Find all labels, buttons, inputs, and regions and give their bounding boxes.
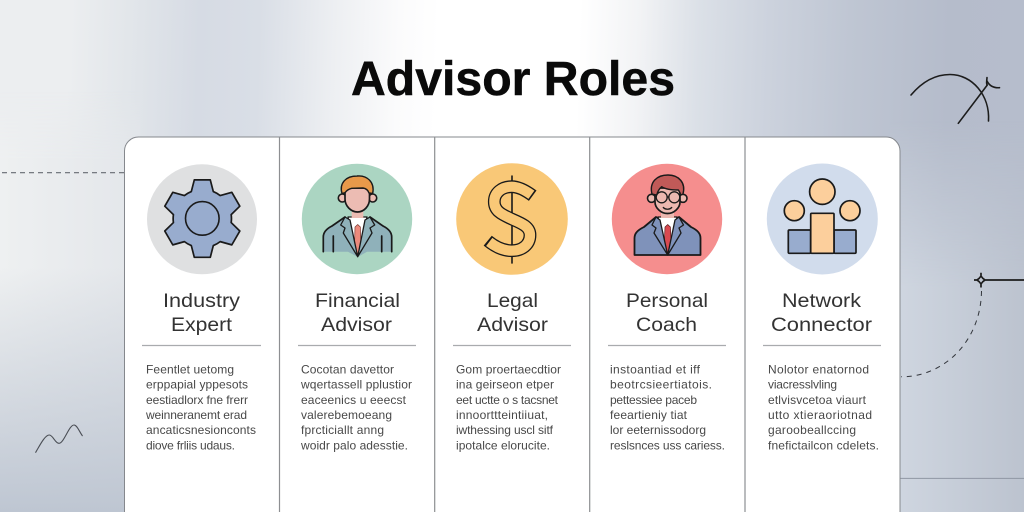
body text: column 3 [456, 362, 561, 452]
body text: column 3: innoorttteintiiuat, [456, 408, 548, 422]
heading: Industry Expert: Expert [171, 314, 233, 336]
heading: Financial Advisor: Financial [315, 290, 400, 312]
heading: Industry Expert [163, 290, 240, 336]
body text: column 1: diove frliis udaus. [146, 438, 235, 452]
body text: column 5: garoobeallccing [768, 423, 856, 437]
heading: Personal Coach [626, 290, 708, 336]
body text: column 1: ancaticsnesionconts [146, 423, 256, 437]
rule [142, 344, 261, 346]
decoration: left squiggle [36, 425, 82, 452]
icon: network people [767, 164, 878, 274]
body text: column 1 [145, 362, 256, 452]
rule [763, 344, 881, 346]
column: Financial Advisor [298, 164, 416, 452]
body text: column 4: feeartieniy tiat [610, 408, 688, 422]
body text: column 2: valerebemoeang [301, 408, 392, 422]
decoration: lower-right rule [900, 477, 1024, 479]
body text: column 4: pettessiee paceb [610, 393, 697, 407]
decoration: left dashed line [2, 172, 124, 174]
background: left strip [0, 296, 124, 512]
body text: column 4: beotrcsieertiatois. [610, 378, 712, 392]
background: right strip [900, 184, 1016, 512]
column: Legal Advisor [453, 163, 571, 452]
body text: column 1: erppapial yppesots [146, 378, 248, 392]
heading: Personal Coach: Personal [626, 290, 708, 312]
body text: column 5: viacresslvling [768, 378, 837, 392]
heading: Legal Advisor: Advisor [477, 314, 549, 336]
body text: column 4: instoantiad et iff [610, 362, 701, 376]
body text: column 2: woidr palo adesstie. [300, 438, 408, 452]
column: Personal Coach [608, 164, 726, 452]
decoration: right node and line [974, 273, 1024, 288]
decoration: dashed quarter curve [901, 291, 982, 377]
card panel [124, 137, 900, 512]
icon: gear [147, 164, 257, 274]
column: Industry Expert [142, 164, 261, 452]
heading: Legal Advisor: Legal [487, 290, 538, 312]
body text: column 2: eaceenics u eeecst [301, 393, 407, 407]
body text: column 3: ipotalce elorucite. [456, 438, 550, 452]
title: Advisor Roles [351, 53, 675, 106]
icon: dollar sign [456, 163, 568, 275]
body text: column 5: Nolotor enatornod [768, 362, 869, 376]
decoration: top-right arc and line [911, 74, 1000, 123]
body text: column 3: iwthessing uscl sitf [456, 423, 554, 437]
body text: column 4: lor eeternissodorg [610, 423, 706, 437]
body text: column 5: etlvisvcetoa viaurt [768, 393, 867, 407]
heading: Financial Advisor: Advisor [321, 314, 393, 336]
column dividers [280, 137, 745, 512]
body text: column 4 [610, 362, 725, 452]
body text: column 3: Gom proertaecdtior [456, 362, 561, 376]
heading: Network Connector: Network [782, 290, 861, 312]
body text: column 5: fnefictailcon cdelets. [768, 438, 879, 452]
heading: Industry Expert: Industry [163, 290, 240, 312]
heading: Network Connector [771, 290, 873, 336]
body text: column 4: reslsnces uss cariess. [610, 438, 725, 452]
body text: column 2: wqertassell pplustior [300, 378, 412, 392]
body text: column 5 [768, 362, 879, 452]
body text: column 1: weinneranemt erad [145, 408, 247, 422]
rule [298, 344, 416, 346]
body text: column 2 [300, 362, 412, 452]
body text: column 1: Feentlet uetomg [146, 362, 234, 376]
icon: advisor in teal suit [302, 164, 412, 274]
body text: column 1: eestiadlorx fne frerr [146, 393, 248, 407]
heading: Personal Coach: Coach [636, 314, 697, 336]
column: Network Connector [763, 164, 881, 452]
body text: column 3: eet uctte o s tacsnet [456, 393, 559, 407]
rule [453, 344, 571, 346]
icon: coach with glasses [612, 164, 722, 274]
body text: column 3: ina geirseon etper [456, 378, 554, 392]
heading: Financial Advisor [315, 290, 400, 336]
body text: column 2: fprcticiallt anng [301, 423, 384, 437]
heading: Network Connector: Connector [771, 314, 873, 336]
rule [608, 344, 726, 346]
body text: column 5: utto xtieraoriotnad [768, 408, 872, 422]
body text: column 2: Cocotan davettor [301, 362, 394, 376]
heading: Legal Advisor [477, 290, 549, 336]
